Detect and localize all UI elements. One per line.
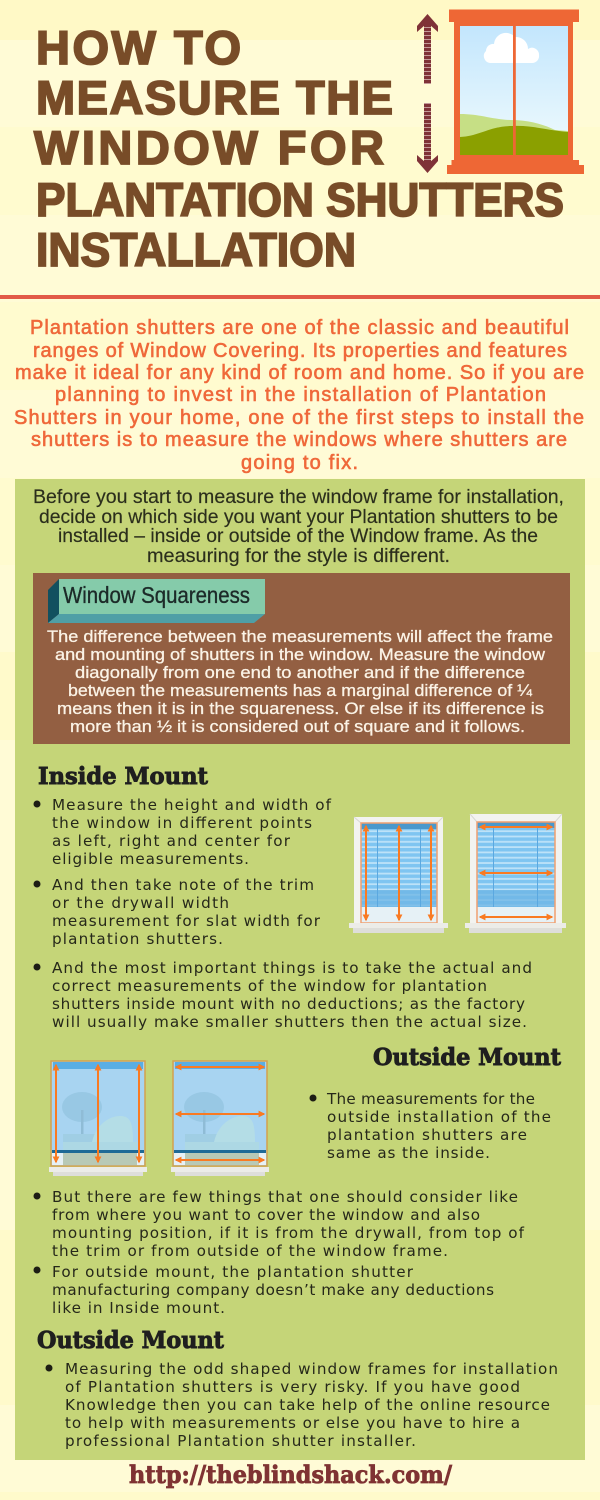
- text block: squareness explanation: more than ½ it is considered out of square and it follows.: [70, 717, 525, 736]
- bullets: outside mount considerations: the trim or from outside of the window frame.: [52, 1242, 448, 1260]
- text block: squareness explanation: [47, 627, 553, 736]
- illustration: outside mount horizontal measures: [171, 1061, 269, 1176]
- title: PLANTATION SHUTTERS: [36, 173, 564, 226]
- bullets: inside mount: correct measurements of the window for plantation: [52, 977, 487, 995]
- intro paragraph: ranges of Window Covering. Its properties and features: [33, 340, 567, 362]
- illustration: outside mount vertical measures: [49, 1061, 147, 1176]
- bullets: inside mount: will usually make smaller shutters then the actual size.: [52, 1013, 527, 1031]
- text block: squareness explanation: The difference between the measurements will affect the frame: [47, 627, 553, 646]
- intro paragraph: planning to invest in the installation of Plantation: [55, 384, 546, 406]
- text block: before you start: [33, 486, 564, 567]
- banner: window squareness: Window Squareness: [63, 582, 250, 608]
- text block: before you start: Before you start to measure the window frame for installation,: [33, 486, 564, 508]
- bullets: outside mount considerations: from where you want to cover the window and also: [52, 1206, 480, 1224]
- text block: squareness explanation: diagonally from one end to another and if the difference: [75, 663, 525, 682]
- bullets: outside mount considerations: [34, 1188, 525, 1317]
- footer url: http://theblindshack.com/: [129, 1460, 452, 1489]
- bullets: inside mount: shutters inside mount with no deductions; as the factory: [52, 995, 525, 1013]
- bullet: odd shaped windows: Measuring the odd shaped window frames for installation: [65, 1360, 558, 1378]
- divider rule: [0, 295, 600, 299]
- bullets: outside mount considerations: like in Inside mount.: [52, 1299, 225, 1317]
- text block: before you start: installed – inside or outside of the Window frame. As the: [58, 525, 538, 547]
- icon: window illustration: [447, 10, 584, 174]
- intro paragraph: shutters is to measure the windows where shutters are: [31, 429, 567, 451]
- icon: vertical measuring arrow: [417, 14, 438, 173]
- bullet: odd shaped windows: professional Plantation shutter installer.: [65, 1432, 416, 1450]
- title: WINDOW FOR: [34, 121, 384, 174]
- bullet: outside measurements: The measurements for the: [326, 1090, 535, 1108]
- text block: squareness explanation: means then it is in the squareness. Or else if its difference is: [57, 699, 544, 718]
- bullets: inside mount: the window in different points: [52, 814, 312, 832]
- bullet: outside measurements: outside installation of the: [327, 1108, 551, 1126]
- banner: window squareness: [48, 579, 265, 623]
- bullets: inside mount: as left, right and center for: [52, 832, 291, 850]
- bullets: outside mount considerations: mounting position, if it is from the drywall, from top of: [52, 1224, 525, 1242]
- intro paragraph: going to fix.: [241, 452, 358, 474]
- bullets: inside mount: And the most important things is to take the actual and: [52, 959, 532, 977]
- intro paragraph: Plantation shutters are one of the classic and beautiful: [30, 317, 569, 339]
- bullet: odd shaped windows: of Plantation shutters is very risky. If you have good: [65, 1378, 520, 1396]
- bullets: outside mount considerations: manufacturing company doesn’t make any deductions: [52, 1281, 494, 1299]
- panel: main content: [15, 479, 585, 1460]
- bullets: inside mount: measurement for slat width for: [52, 912, 321, 930]
- bullets: outside mount considerations: For outside mount, the plantation shutter: [52, 1263, 414, 1281]
- text block: squareness explanation: between the measurements has a marginal difference of ¼: [68, 681, 533, 700]
- bullets: inside mount: [34, 796, 532, 1031]
- title: HOW TO: [36, 21, 241, 74]
- bullets: inside mount: Measure the height and width of: [52, 796, 332, 814]
- bullet: outside measurements: same as the inside.: [327, 1144, 490, 1162]
- bullet: odd shaped windows: Knowledge then you can take help of the online resource: [65, 1396, 550, 1414]
- bullets: inside mount: or the drywall width: [52, 894, 229, 912]
- intro paragraph: [14, 317, 584, 474]
- bullets: inside mount: eligible measurements.: [52, 850, 249, 868]
- bullet: outside measurements: [310, 1090, 551, 1162]
- bullet: outside measurements: plantation shutters are: [327, 1126, 527, 1144]
- heading: outside mount: Outside Mount: [373, 1044, 561, 1071]
- bullets: inside mount: And then take note of the trim: [52, 876, 314, 894]
- title: [34, 21, 564, 276]
- illustration: inside mount vertical measures: [349, 817, 448, 933]
- bullet: odd shaped windows: to help with measurements or else you have to hire a: [65, 1414, 520, 1432]
- bullets: inside mount: plantation shutters.: [52, 930, 223, 948]
- intro paragraph: make it ideal for any kind of room and home. So if you are: [15, 362, 584, 384]
- panel: window squareness: [33, 573, 570, 744]
- title: MEASURE THE: [36, 71, 393, 124]
- heading: inside mount: Inside Mount: [38, 763, 208, 790]
- bullets: outside mount considerations: But there are few things that one should consider like: [52, 1188, 518, 1206]
- illustration: inside mount horizontal measures: [465, 814, 566, 933]
- heading: odd shaped outside mount: Outside Mount: [37, 1327, 224, 1354]
- text block: before you start: decide on which side you want your Plantation shutters to be: [39, 506, 558, 528]
- title: INSTALLATION: [36, 223, 356, 276]
- text block: before you start: measuring for the style is different.: [147, 545, 450, 567]
- intro paragraph: Shutters in your home, one of the first steps to install the: [14, 407, 584, 429]
- bullet: odd shaped windows: [46, 1360, 558, 1450]
- text block: squareness explanation: and mounting of shutters in the window. Measure the window: [55, 645, 546, 664]
